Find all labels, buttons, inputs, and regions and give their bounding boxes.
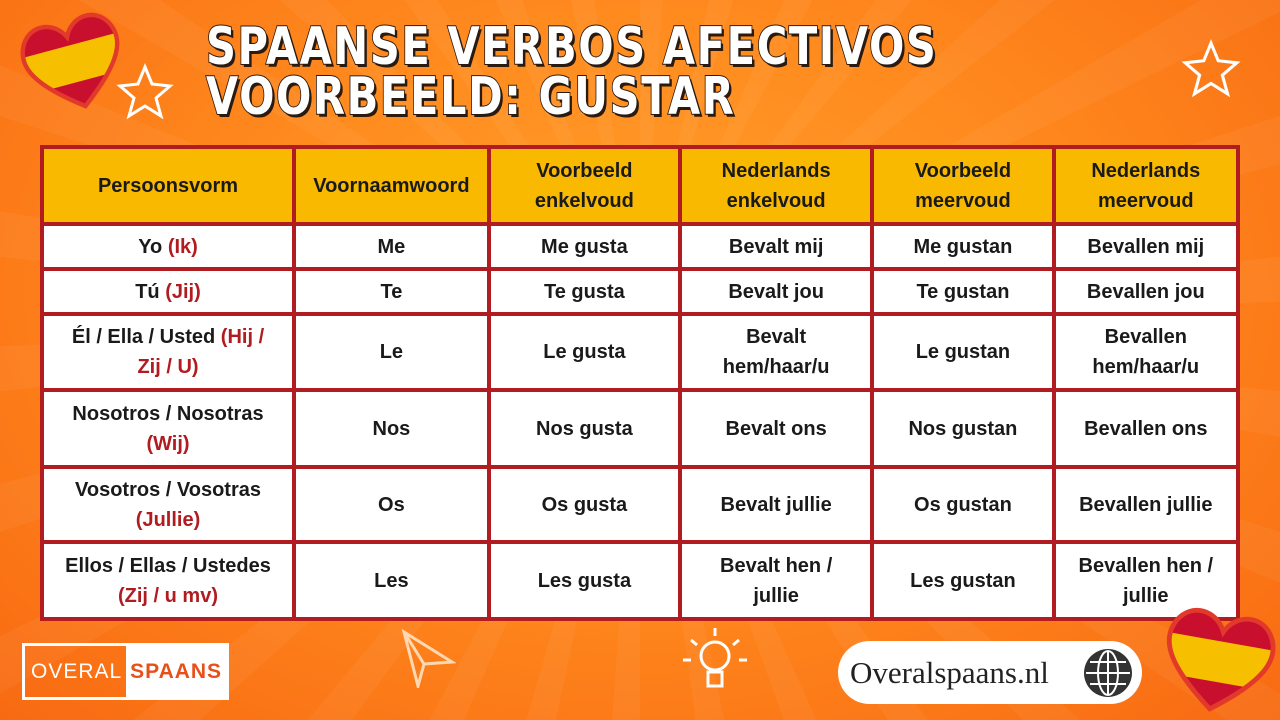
- icon: globe: [1084, 649, 1132, 697]
- table: gustar conjugation: Bevalt jullie: [721, 494, 832, 516]
- table: gustar conjugation: Voorbeeld: [536, 160, 633, 182]
- table: gustar conjugation: Te gusta: [544, 280, 625, 302]
- table: gustar conjugation: Os: [378, 494, 405, 516]
- title: SPAANSE VERBOS AFECTIVOS: [206, 17, 937, 77]
- table: gustar conjugation: Le gusta: [543, 341, 626, 363]
- icon: heart flag bottom-right: [1166, 608, 1276, 712]
- table: gustar conjugation: meervoud: [1098, 190, 1194, 212]
- table: gustar conjugation: Nos gusta: [536, 418, 633, 440]
- table: gustar conjugation: enkelvoud: [535, 190, 634, 212]
- table: gustar conjugation: Bevallen jou: [1087, 280, 1205, 302]
- table: gustar conjugation: Nos gustan: [908, 418, 1017, 440]
- table: gustar conjugation: Me gustan: [913, 236, 1012, 258]
- logo: Overal Spaans: SPAANS: [130, 660, 222, 682]
- table: gustar conjugation: Bevalt ons: [726, 418, 827, 440]
- icon: star top-left: [116, 63, 174, 120]
- table: gustar conjugation: Voorbeeld: [915, 160, 1011, 182]
- table: gustar conjugation: Nederlands: [722, 160, 831, 182]
- table: gustar conjugation: (Zij / u mv): [118, 584, 218, 606]
- table: gustar conjugation: Voornaamwoord: [313, 174, 470, 196]
- table: gustar conjugation: Nederlands: [1091, 160, 1200, 182]
- icon: paper plane: [402, 628, 456, 688]
- table: gustar conjugation: Bevalt: [746, 326, 806, 348]
- table: gustar conjugation: hem/haar/u: [723, 356, 829, 378]
- table: gustar conjugation: Os gusta: [542, 494, 627, 516]
- table: gustar conjugation: Bevallen: [1105, 326, 1187, 348]
- table: gustar conjugation: enkelvoud: [727, 190, 826, 212]
- table: gustar conjugation: meervoud: [915, 190, 1011, 212]
- icon: heart flag top-left: [20, 12, 120, 109]
- table: gustar conjugation: (Jullie): [136, 508, 200, 530]
- table: gustar conjugation: Vosotros / Vosotras: [75, 478, 261, 500]
- table: gustar conjugation: Les: [374, 570, 409, 592]
- table: gustar conjugation: Yo (Ik): [138, 236, 198, 258]
- table: gustar conjugation: Me gusta: [541, 236, 628, 258]
- table: gustar conjugation: Ellos / Ellas / Ustedes: [65, 554, 271, 576]
- table: gustar conjugation: Bevalt hen /: [720, 554, 832, 576]
- table: gustar conjugation: Les gustan: [910, 570, 1016, 592]
- table: gustar conjugation: Él / Ella / Usted (Hij /: [72, 326, 264, 348]
- table: gustar conjugation: Bevallen ons: [1084, 418, 1207, 440]
- table: gustar conjugation: Persoonsvorm: [98, 174, 238, 196]
- table: gustar conjugation: Bevallen jullie: [1079, 494, 1212, 516]
- table: gustar conjugation: Le gustan: [916, 341, 1010, 363]
- table: gustar conjugation: jullie: [1123, 584, 1169, 606]
- table: gustar conjugation: Bevalt jou: [728, 280, 824, 302]
- table: gustar conjugation: Nosotros / Nosotras: [72, 402, 264, 424]
- table: gustar conjugation: Tú (Jij): [135, 280, 201, 302]
- table: gustar conjugation: Zij / U): [137, 356, 199, 378]
- table: gustar conjugation: Bevallen hen /: [1079, 554, 1213, 576]
- logo: Overal Spaans: OVERAL: [31, 660, 122, 682]
- table: gustar conjugation: Le: [380, 341, 403, 363]
- logo: Overal Spaans: [22, 643, 229, 700]
- title: VOORBEELD: GUSTAR: [206, 67, 735, 127]
- icon: lightbulb: [683, 628, 747, 688]
- icon: star top-right: [1182, 39, 1240, 98]
- title: [205, 17, 937, 127]
- table: gustar conjugation: Bevallen mij: [1087, 236, 1204, 258]
- table: gustar conjugation: Os gustan: [914, 494, 1012, 516]
- table: gustar conjugation: (Wij): [146, 432, 190, 454]
- table: gustar conjugation: jullie: [753, 584, 799, 606]
- table: gustar conjugation: Nos: [372, 418, 410, 440]
- table: gustar conjugation: Te: [380, 280, 402, 302]
- table: gustar conjugation: Me: [378, 236, 405, 258]
- table: gustar conjugation: Bevalt mij: [729, 236, 823, 258]
- table: gustar conjugation: Les gusta: [538, 570, 631, 592]
- table: gustar conjugation: Te gustan: [916, 280, 1009, 302]
- url pill: Overalspaans.nl: [850, 655, 1049, 690]
- table: gustar conjugation: [40, 145, 1240, 621]
- table: gustar conjugation: hem/haar/u: [1092, 356, 1199, 378]
- url pill: [838, 641, 1142, 704]
